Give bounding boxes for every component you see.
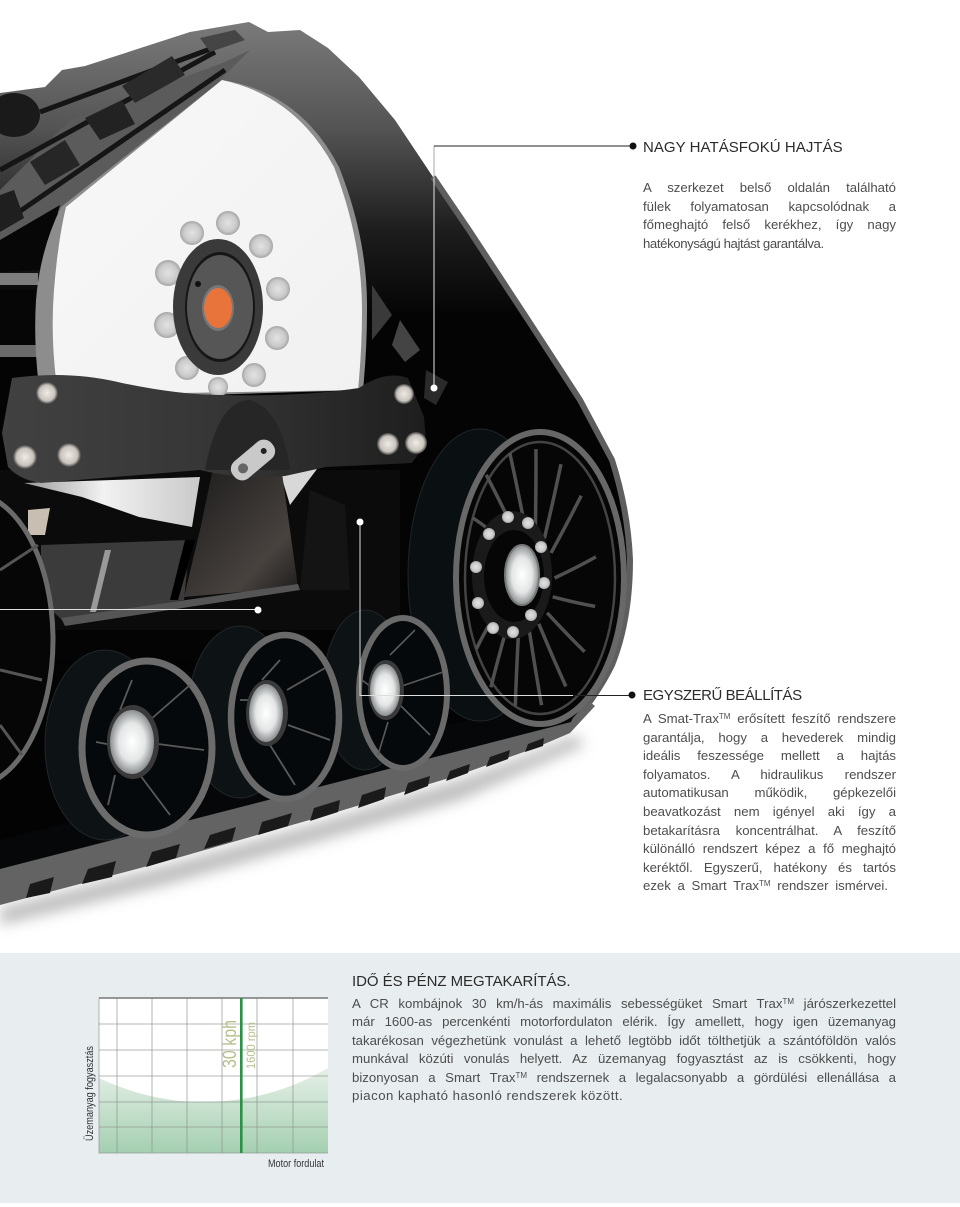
chart plot background bbox=[99, 998, 328, 1153]
text block: simple adjustment: ezek a Smart TraxTM rendszer ismérvei. bbox=[643, 878, 888, 893]
text block: simple adjustment: beavatkozást nem igényel aki így a bbox=[643, 804, 896, 819]
partial left road wheel bbox=[0, 493, 53, 787]
arm bolts bbox=[13, 382, 427, 469]
drive wheel hub with orange cap bbox=[173, 239, 263, 375]
heading: simple adjustment: EGYSZERŰ BEÁLLÍTÁS bbox=[643, 687, 802, 704]
large rear road wheel bbox=[408, 429, 624, 724]
arm plate bbox=[2, 375, 426, 483]
text block: time and money savings: A CR kombájnok 30 km/h-ás maximális sebességüket Smart TraxTM járószerkezettel bbox=[352, 996, 896, 1010]
y axis label: Üzemanyag fogyasztás bbox=[84, 1046, 96, 1141]
callout leader: top bbox=[430, 142, 636, 392]
text block: simple adjustment: automatikusan működik, gépkezelői bbox=[643, 785, 896, 800]
chart top border bbox=[99, 997, 328, 999]
heading: high efficiency drive: NAGY HATÁSFOKÚ HAJTÁS bbox=[643, 139, 843, 156]
arm pivot bbox=[205, 400, 290, 470]
link plate bbox=[227, 436, 279, 484]
small road wheel 1 bbox=[45, 650, 212, 840]
text block: high efficiency drive: fülek folyamatosan kapcsolódnak a bbox=[643, 199, 896, 214]
text block: high efficiency drive: főmeghajtó felső kerékhez, így nagy bbox=[643, 217, 896, 232]
text block: time and money savings: bizonyosan a Smart TraxTM rendszernek a legalacsonyabb a gördülési ellenállása a bbox=[352, 1070, 896, 1085]
1600 rpm label: 1600 rpm bbox=[246, 1022, 258, 1069]
30 kph label: 30 kph bbox=[220, 1020, 241, 1068]
text block: time and money savings: takarékosan végezhetünk vonulást a lehető legtöbb időt tölthetjük a szántóföldön valós bbox=[352, 1033, 896, 1048]
text block: simple adjustment bbox=[643, 711, 896, 893]
callout leader: middle bbox=[0, 606, 262, 614]
30 kph marker line bbox=[240, 998, 243, 1153]
product photo: tracked undercarriage bbox=[0, 22, 636, 930]
text block: simple adjustment: folyamatos. A hidraulikus rendszer bbox=[643, 767, 896, 782]
lower bracket bbox=[0, 465, 400, 630]
text block: simple adjustment: betakarításra koncentrálhat. A feszítő bbox=[643, 823, 896, 838]
text block: time and money savings bbox=[352, 996, 896, 1103]
text block: time and money savings: piacon kapható hasonló rendszerek között. bbox=[352, 1088, 623, 1103]
upper track ribs and lugs bbox=[0, 30, 448, 405]
track silhouette bbox=[0, 22, 630, 890]
x axis label: Motor fordulat bbox=[268, 1158, 324, 1170]
text block: time and money savings: már 1600-as percenkénti motorfordulaton elérik. Így amellett, hogy igen üzemanyag bbox=[352, 1014, 896, 1029]
text block: simple adjustment: garantálja, hogy a hevederek mindig bbox=[643, 730, 896, 745]
small road wheel 3 bbox=[323, 610, 447, 770]
text block: simple adjustment: különálló rendszert képez a fő meghajtó bbox=[643, 841, 896, 856]
callout leader: bottom bbox=[356, 518, 636, 698]
fuel consumption chart bbox=[84, 997, 328, 1170]
track bottom band bbox=[0, 690, 595, 905]
text block: high efficiency drive bbox=[643, 180, 896, 251]
track outer edge strip bbox=[433, 177, 630, 730]
text block: time and money savings: munkával közúti vonulás helyett. Az üzemanyag fogyasztást az is csökkenti, hogy bbox=[352, 1051, 896, 1066]
text block: simple adjustment: A Smat-TraxTM erősített feszítő rendszere bbox=[643, 711, 896, 726]
text block: simple adjustment: ideális feszessége mellett a hajtás bbox=[643, 748, 896, 763]
fuel curve area bbox=[99, 1068, 328, 1153]
text block: high efficiency drive: A szerkezet belső oldalán található bbox=[643, 180, 896, 195]
ground shadow bbox=[0, 735, 585, 925]
white drive wheel disk bbox=[35, 80, 367, 400]
text block: high efficiency drive: hatékonyságú hajtást garantálva. bbox=[643, 236, 824, 251]
chart grid bbox=[99, 998, 328, 1153]
panel: time and money savings bbox=[0, 953, 960, 1203]
small road wheel 2 bbox=[188, 626, 339, 799]
text block: simple adjustment: keréktől. Egyszerű, hatékony és tartós bbox=[643, 860, 896, 875]
drive wheel bolt ring bbox=[154, 211, 290, 397]
heading: time and money savings: IDŐ ÉS PÉNZ MEGTAKARÍTÁS. bbox=[352, 973, 571, 990]
